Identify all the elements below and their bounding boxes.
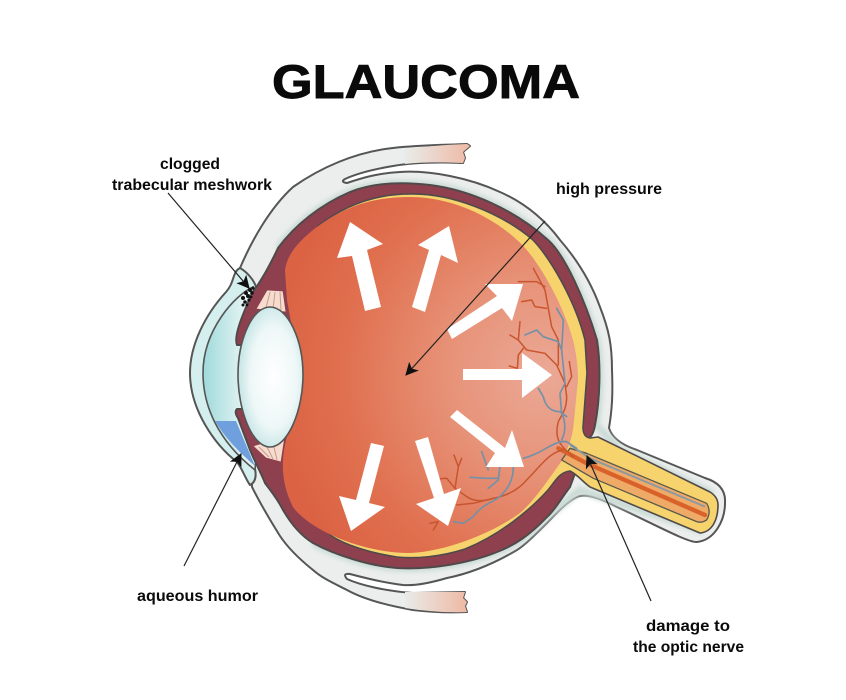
leader: optic nerve damage [587, 456, 651, 601]
label: damage to the optic nerve [633, 618, 744, 656]
label: clogged trabecular meshwork: trabecular meshwork [112, 177, 272, 194]
arrow lower right [450, 410, 524, 467]
vitreous body [283, 197, 578, 553]
eye muscle: top [405, 144, 470, 164]
label: damage to the optic nerve: damage to [646, 618, 730, 635]
cornea [190, 268, 262, 485]
eye diagram [190, 144, 725, 612]
label: high pressure: high pressure [556, 181, 662, 198]
retina and optic nerve sheath [300, 194, 718, 558]
eye muscle: bottom [405, 592, 467, 612]
leader: aqueous humor [184, 454, 241, 566]
title: GLAUCOMA [272, 55, 580, 108]
arrow down-right [415, 437, 461, 526]
retinal vessels: red [430, 268, 573, 530]
retinal vessels: blue [453, 308, 577, 523]
leader: high pressure [406, 221, 545, 375]
optic nerve core [558, 445, 709, 522]
lens [238, 307, 303, 447]
label: aqueous humor: aqueous humor [137, 588, 258, 605]
anterior chamber [203, 287, 262, 470]
aqueous humor [215, 421, 255, 466]
label: clogged trabecular meshwork [112, 156, 272, 194]
sclera soft shading [278, 183, 710, 568]
leader: trabecular meshwork [168, 193, 249, 288]
ciliary fibers: top [256, 290, 286, 312]
pressure arrows [337, 222, 552, 531]
ciliary fibers: bottom [253, 436, 285, 462]
label: damage to the optic nerve: the optic nerve [633, 639, 744, 656]
arrow up-left [337, 222, 383, 311]
arrow down-left [339, 443, 385, 531]
label: clogged trabecular meshwork: clogged [160, 156, 220, 173]
arrow right [463, 353, 552, 398]
sclera and optic nerve sheath [240, 144, 725, 612]
arrow up-right [412, 226, 458, 312]
choroid and iris [236, 183, 599, 568]
arrow upper right [447, 284, 523, 339]
clogged trabecular meshwork [241, 286, 254, 306]
